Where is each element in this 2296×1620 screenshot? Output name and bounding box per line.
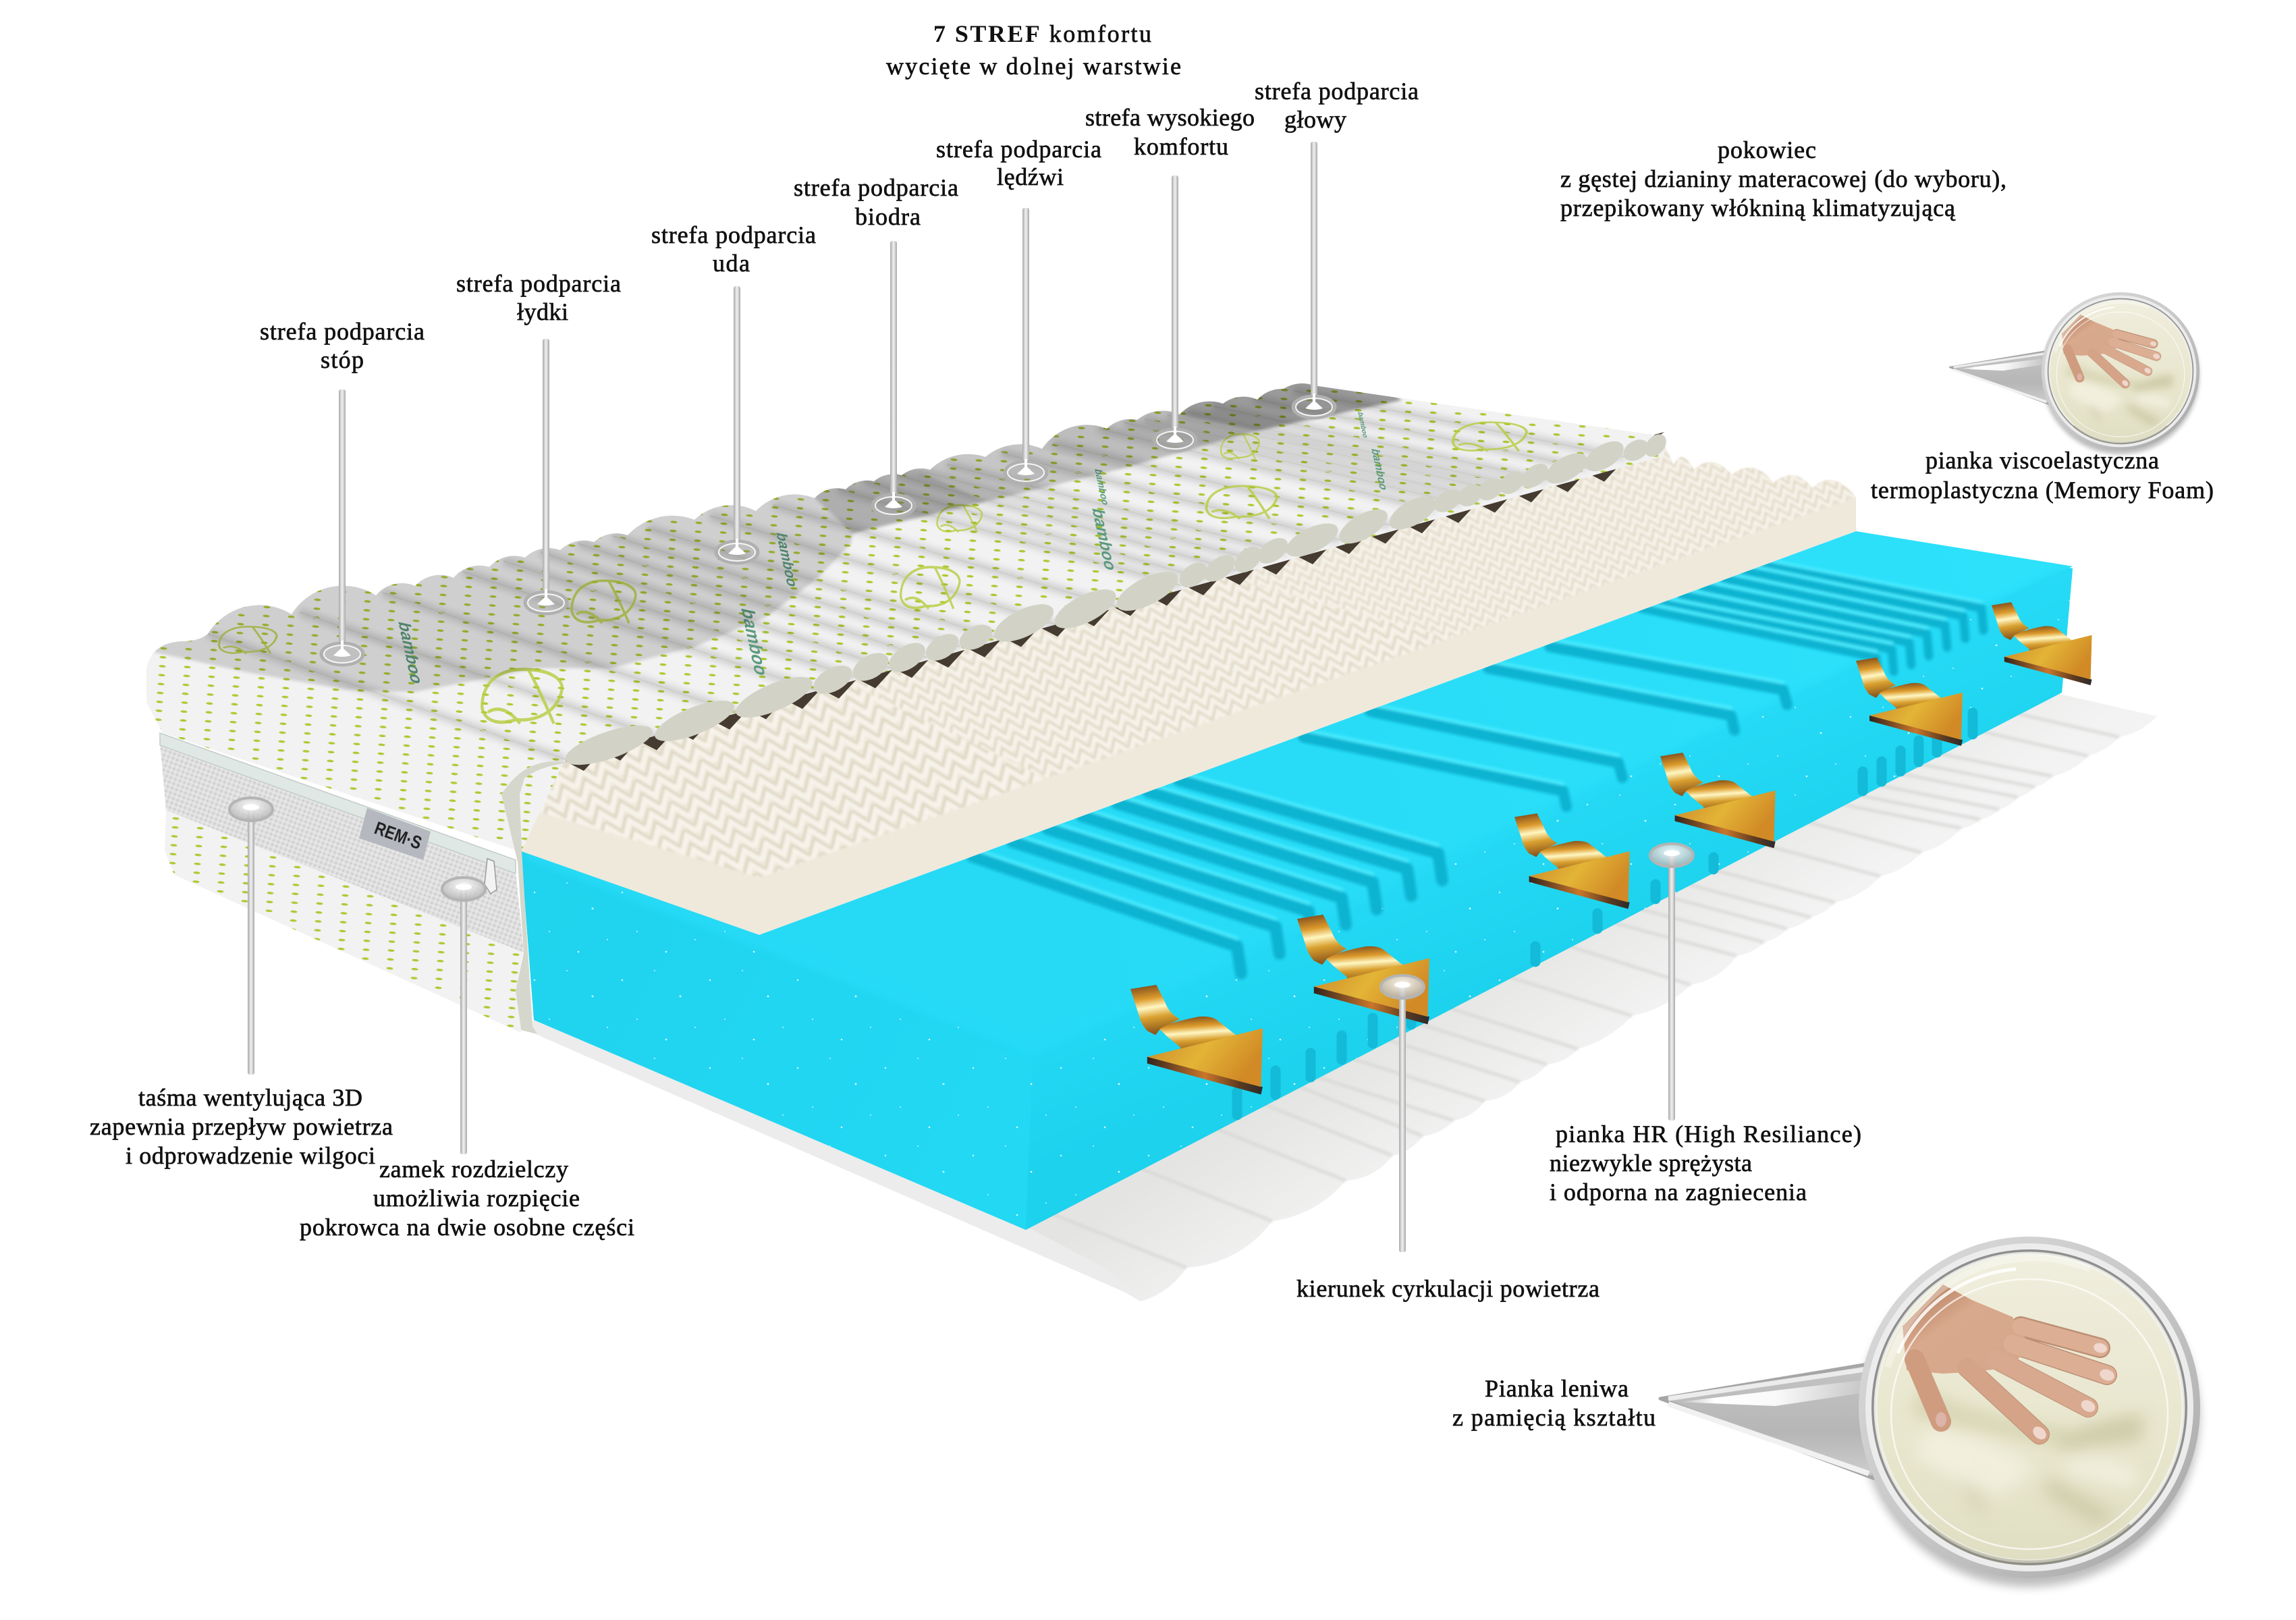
translucent zone overlays: [154, 383, 1402, 693]
label: biodra: [794, 174, 958, 230]
pin: zamek: [442, 878, 485, 1154]
label: stóp: stóp: [321, 346, 364, 373]
pin: stóp: [321, 389, 363, 665]
pin: taśma: [229, 798, 273, 1075]
label: taśma wentylująca: taśma wentylująca 3D: [138, 1084, 362, 1111]
label: uda: [651, 221, 816, 277]
top grooves: [973, 559, 1984, 973]
woven brand names: bamboo: [1088, 507, 1120, 572]
label: pianka viscoelastyczna: pianka viscoelastyczna: [1925, 447, 2159, 474]
roll seams: [208, 391, 1625, 759]
arrow: air flow 6: [1992, 602, 2092, 685]
heading: 7 stref komfortu: wycięte w dolnej warstwie: [886, 53, 1181, 80]
label: pianka HR: pianka HR (High Resiliance): [1556, 1120, 1861, 1148]
pin: łydki: [525, 339, 567, 614]
arrow: air flow 3: [1514, 813, 1630, 909]
label: pianka leniwa: Pianka leniwa: [1485, 1375, 1629, 1402]
label: taśma wentylująca: zapewnia przepływ powietrza: [90, 1113, 393, 1140]
label: kierunek cyrkulacji: kierunek cyrkulacji powietrza: [1296, 1275, 1600, 1302]
label: biodra: strefa podparcia: [794, 174, 958, 201]
label: lędźwi: strefa podparcia: [936, 136, 1101, 163]
label: zamek rozdzielczy: umożliwia rozpięcie: [373, 1185, 580, 1212]
label: stóp: [260, 318, 425, 373]
arrow: air flow 4: [1660, 753, 1776, 848]
middle layer: cyan HR foam with grooves: [521, 531, 2073, 1230]
pin: komfort: [1154, 176, 1196, 451]
heading: 7 stref komfortu: 7 STREF komfortu: [933, 20, 1151, 47]
label: taśma wentylująca: [90, 1084, 393, 1169]
mattress: [135, 338, 2157, 1301]
label: pianka HR: i odporna na zagniecenia: [1550, 1179, 1807, 1206]
sage binding on cover corner: [501, 761, 568, 1034]
bottom layer: white quilted strips: [526, 694, 2157, 1301]
label: głowy: strefa podparcia: [1255, 78, 1419, 105]
label: łydki: łydki: [517, 298, 568, 325]
label: pianka leniwa: z pamięcią kształtu: [1452, 1404, 1656, 1431]
pin: uda: [716, 286, 758, 563]
arrow: air flow 5: [1856, 657, 1963, 746]
woven brand names: [394, 411, 1390, 686]
woven brand names: bamboo: [1369, 448, 1390, 491]
cover upper part with rolls: [135, 338, 1670, 1034]
label: pokowiec: z gęstej dzianiny materacowej (do wyboru),: [1560, 165, 2006, 192]
label: pianka viscoelastyczna: [1871, 447, 2214, 504]
label: zamek rozdzielczy: zamek rozdzielczy: [379, 1156, 568, 1183]
label: lędźwi: lędźwi: [997, 163, 1064, 190]
woven brand names: bamboo: [1356, 411, 1369, 439]
label: lędźwi: [936, 136, 1101, 190]
label: pokowiec: [1560, 136, 2006, 221]
arrow: air flow 2: [1297, 915, 1429, 1024]
brand label: [359, 808, 431, 860]
callout: small memory foam lens: [1950, 292, 2199, 454]
woven brand names: bamboo: [1092, 468, 1111, 506]
label: głowy: głowy: [1284, 106, 1346, 133]
label: pokowiec: pokowiec: [1718, 136, 1816, 163]
woven leaf logos: [219, 423, 1527, 724]
callout: large memory foam lens: [1660, 1237, 2200, 1587]
label: łydki: strefa podparcia: [456, 270, 621, 297]
zipper pull: [485, 859, 497, 894]
cover lower part, mesh band and zipper: [160, 733, 524, 1033]
pin: lędźwi: [1005, 208, 1047, 483]
label: pianka HR: [1550, 1120, 1861, 1206]
label: uda: strefa podparcia: [651, 221, 816, 248]
label: wysokiego komfortu: komfortu: [1134, 133, 1228, 160]
pin: kierunek cyrkulacji: [1381, 975, 1424, 1252]
heading: 7 stref komfortu: [886, 20, 1181, 80]
arrow: air flow 1: [1130, 985, 1263, 1094]
label: stóp: strefa podparcia: [260, 318, 425, 345]
label: pianka viscoelastyczna: termoplastyczna (Memory Foam): [1871, 477, 2214, 504]
pin: biodra: [873, 241, 914, 516]
bottom slots: [1237, 713, 1973, 1115]
brand label: REM·S: [372, 817, 425, 853]
label: biodra: biodra: [855, 203, 921, 230]
label: łydki: [456, 270, 621, 325]
label: wysokiego komfortu: strefa wysokiego: [1085, 104, 1255, 131]
woven brand names: bamboo: [737, 607, 773, 678]
woven brand names: bamboo: [773, 531, 801, 589]
label: wysokiego komfortu: [1085, 104, 1255, 160]
label: pokowiec: przepikowany włókniną klimatyzującą: [1560, 194, 1956, 221]
dark gap under cover: [566, 432, 1664, 771]
label: zamek rozdzielczy: pokrowca na dwie osobne części: [300, 1214, 634, 1241]
label: uda: uda: [713, 250, 750, 277]
pin: pianka HR: [1650, 844, 1693, 1120]
label: taśma wentylująca: i odprowadzenie wilgoci: [126, 1142, 375, 1169]
label: pianka HR: niezwykle sprężysta: [1550, 1150, 1752, 1177]
woven brand names: bamboo: [394, 620, 427, 686]
label: zamek rozdzielczy: [300, 1156, 634, 1241]
label: głowy: [1255, 78, 1419, 133]
cut roll ends: [561, 430, 1670, 773]
pin: głowy: [1293, 142, 1335, 418]
label: pianka leniwa: [1452, 1375, 1656, 1431]
top layer: egg-crate memory foam: [521, 446, 1856, 935]
